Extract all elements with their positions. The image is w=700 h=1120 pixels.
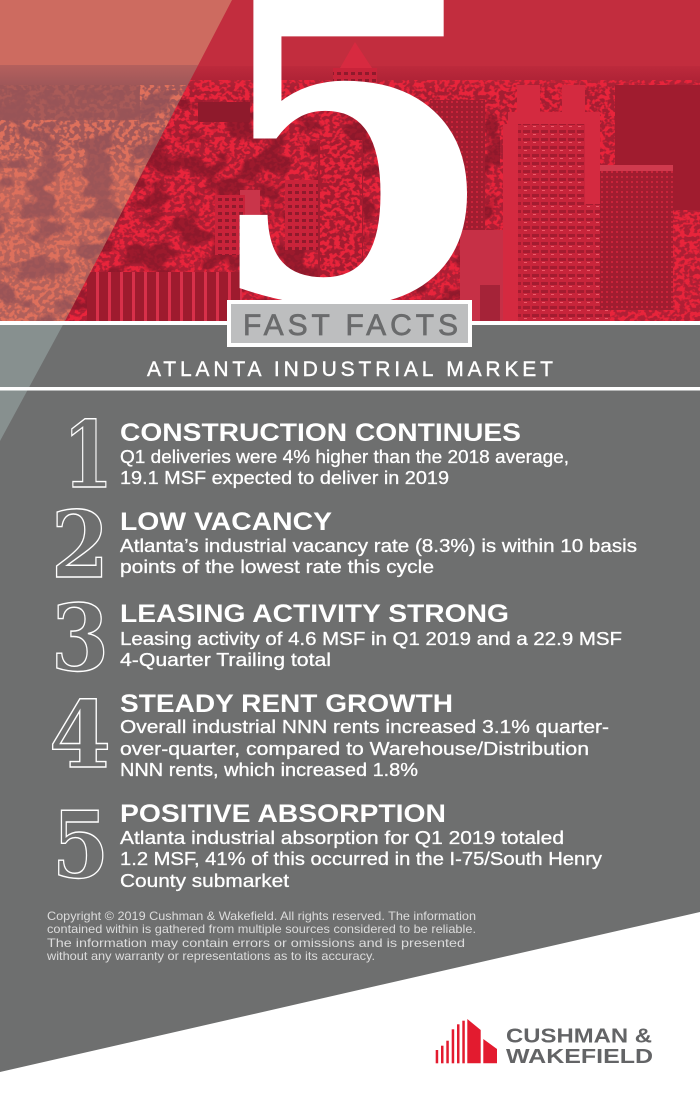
rule below header <box>0 387 700 390</box>
panel: city skyline hero <box>0 0 700 321</box>
logo: Cushman & Wakefield <box>436 1019 653 1068</box>
fact 4: Overall industrial NNN rents increased 3.1% quarter- <box>120 716 609 737</box>
fact 1: 1 <box>63 401 113 509</box>
panel: light diagonal overlay <box>0 0 240 321</box>
logo: Cushman & Wakefield: WAKEFIELD <box>506 1046 653 1068</box>
fact 4: NNN rents, which increased 1.8% <box>120 759 418 780</box>
fact 1: CONSTRUCTION CONTINUES <box>120 419 521 447</box>
fact 5: POSITIVE ABSORPTION <box>120 800 446 828</box>
icon: red building mark <box>436 1019 497 1063</box>
fact 3 <box>51 584 622 692</box>
fact 4: STEADY RENT GROWTH <box>120 690 453 718</box>
fact 1: 19.1 MSF expected to deliver in 2019 <box>120 467 449 488</box>
fact 5: County submarket <box>120 870 289 891</box>
logo: Cushman & Wakefield: CUSHMAN & <box>506 1026 652 1048</box>
right building <box>600 167 673 310</box>
fact 4: 4 <box>49 681 111 789</box>
fact 2 <box>51 491 637 599</box>
fact 2: LOW VACANCY <box>120 508 332 536</box>
fact 4: over-quarter, compared to Warehouse/Distribution <box>120 738 589 759</box>
copyright note: without any warranty or representations as to its accuracy. <box>46 949 375 963</box>
fact 3: LEASING ACTIVITY STRONG <box>120 600 509 628</box>
subtitle: ATLANTA INDUSTRIAL MARKET <box>147 358 553 381</box>
panel: grey content background <box>0 321 700 1072</box>
tall tower <box>503 85 610 321</box>
fact 1: Q1 deliveries were 4% higher than the 2018 average, <box>120 446 569 467</box>
fact 3: 3 <box>51 584 109 692</box>
copyright note: The information may contain errors or omissions and is presented <box>47 936 465 950</box>
fact 4 <box>49 681 609 789</box>
copyright note <box>46 909 476 963</box>
diagonal light grey wedge <box>0 321 65 441</box>
fact 3: 4-Quarter Trailing total <box>120 649 331 670</box>
fact 5: 5 <box>52 791 109 899</box>
fact 2: Atlanta’s industrial vacancy rate (8.3%) is within 10 basis <box>120 535 637 556</box>
badge: fast facts <box>227 300 472 347</box>
fact 5: 1.2 MSF, 41% of this occurred in the I-75/South Henry <box>120 848 603 869</box>
fact 2: points of the lowest rate this cycle <box>120 556 434 577</box>
fact 5 <box>52 791 603 899</box>
fact 3: Leasing activity of 4.6 MSF in Q1 2019 and a 22.9 MSF <box>120 628 622 649</box>
copyright note: contained within is gathered from multiple sources considered to be reliable. <box>47 922 476 936</box>
rule above header <box>0 321 700 325</box>
copyright note: Copyright © 2019 Cushman & Wakefield. All rights reserved. The information <box>47 909 476 923</box>
badge: fast facts: FAST FACTS <box>243 309 458 342</box>
lower left building <box>87 272 242 321</box>
fact 1 <box>63 401 569 509</box>
fact 5: Atlanta industrial absorption for Q1 2019 totaled <box>120 827 564 848</box>
fact 2: 2 <box>51 491 109 599</box>
